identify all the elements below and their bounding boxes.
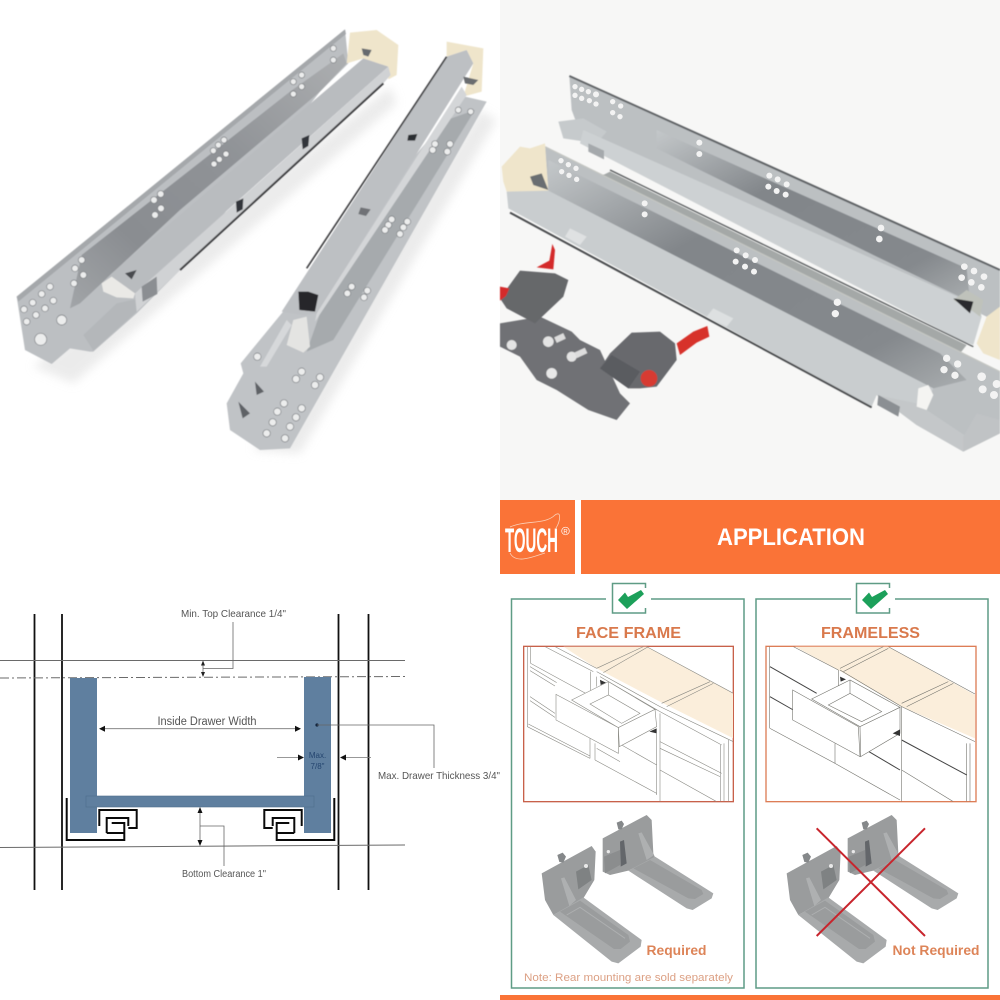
back slide — [558, 76, 1000, 360]
header: APPLICATION — [581, 500, 1000, 574]
label: max drawer thickness: Max. Drawer Thickness 3/4" — [378, 770, 500, 782]
label: bottom clearance — [182, 807, 266, 880]
label: top clearance — [181, 608, 286, 677]
illustration: not required bracket pair with red cross — [787, 815, 958, 963]
illustration: frameless cabinet — [766, 646, 976, 802]
icon: grey soft-close locking devices with red levers — [500, 244, 709, 420]
photo panel: slides with soft-close locking devices — [500, 0, 1000, 500]
label: inside drawer width — [99, 716, 301, 732]
label: Required: Required — [646, 943, 706, 958]
icon: green check box — [612, 584, 646, 613]
bottom orange strip — [500, 995, 1000, 1000]
heading: FRAMELESS: FRAMELESS — [821, 625, 920, 642]
right slide — [227, 42, 487, 450]
label: inside drawer width: Inside Drawer Width — [158, 716, 256, 728]
diagram: drawer clearance cross-section — [0, 608, 500, 890]
panel: face frame — [512, 584, 744, 988]
logo box: TOUCH: R — [563, 530, 568, 536]
front slide — [502, 143, 1000, 452]
illustration: required rear mounting bracket pair — [542, 815, 713, 963]
panel: frameless — [756, 584, 988, 988]
label: max drawer thickness — [315, 723, 500, 782]
cabinet vertical walls — [34, 614, 368, 890]
label: Not Required: Not Required — [892, 943, 980, 958]
icon: green check box — [856, 584, 890, 613]
label: max 7/8 inch gap — [277, 751, 371, 771]
left slide — [17, 29, 398, 364]
panel: application guide — [500, 500, 1000, 1000]
left slide profile — [67, 798, 137, 840]
right slide profile — [264, 798, 334, 840]
heading: FACE FRAME: FACE FRAME — [576, 625, 681, 642]
label: bottom clearance: Bottom Clearance 1" — [182, 869, 266, 880]
label: top clearance: Min. Top Clearance 1/4" — [181, 608, 286, 620]
drawer box sides and bottom — [70, 677, 331, 833]
logo box: TOUCH: TOUCH — [505, 522, 558, 560]
label: max 7/8 inch gap: 7/8" — [311, 762, 325, 771]
logo box: TOUCH — [500, 500, 575, 574]
note: rear mounting: Note: Rear mounting are sold separately — [524, 972, 734, 984]
photo panel: two drawer slides on white — [17, 29, 497, 453]
label: max 7/8 inch gap: Max. — [309, 751, 326, 760]
header: APPLICATION: APPLICATION — [717, 524, 865, 551]
illustration: face frame cabinet — [524, 646, 733, 802]
